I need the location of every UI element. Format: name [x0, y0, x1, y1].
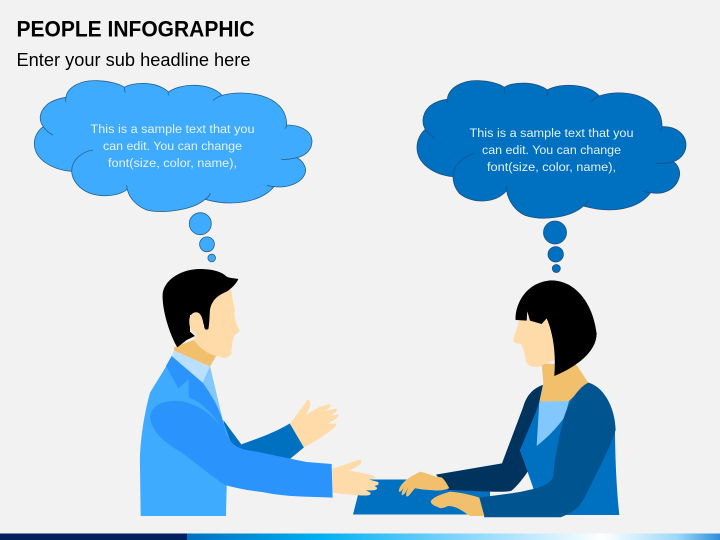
- bubble text: left: [90, 122, 254, 170]
- man ear: [189, 312, 205, 334]
- panel: right thought bubble: [417, 81, 686, 273]
- woman torso: [520, 383, 619, 515]
- man hair: [163, 269, 238, 347]
- woman near hand: [431, 492, 484, 516]
- panel: left thought bubble: [34, 81, 312, 262]
- woman far arm: [436, 385, 543, 492]
- bubble text: right: This is a sample text that you: [470, 126, 634, 140]
- bubble text: right: can edit. You can change: [482, 143, 621, 157]
- man face: [194, 289, 240, 358]
- woman far hand: [399, 472, 449, 497]
- bubble text: right: [470, 126, 634, 174]
- cloud shape: left: [34, 81, 312, 212]
- thought dots: left: [189, 213, 216, 262]
- man far hand: [291, 400, 338, 447]
- thought dots: right: [544, 221, 566, 272]
- man near hand: [333, 460, 378, 495]
- woman hair: [516, 280, 597, 376]
- man near arm: [150, 401, 333, 498]
- figure: woman: [399, 280, 619, 517]
- subtitle: Enter your sub headline here: [16, 50, 250, 70]
- woman near arm: [479, 383, 616, 517]
- man neck: [174, 340, 217, 367]
- bubble text: left: can edit. You can change: [103, 139, 242, 153]
- bubble text: left: This is a sample text that you: [90, 122, 254, 136]
- woman face: [513, 303, 557, 367]
- cloud shape: right: [417, 81, 686, 218]
- man inner shirt: [203, 367, 223, 420]
- figure: man: [140, 269, 378, 516]
- man torso: [140, 356, 230, 516]
- footer bar: [0, 534, 720, 540]
- woman inset: [537, 401, 569, 446]
- table: [353, 480, 490, 514]
- title: PEOPLE INFOGRAPHIC: [16, 16, 254, 42]
- bubble text: left: font(size, color, name),: [108, 156, 237, 170]
- man far arm: [223, 420, 304, 473]
- woman neck: [539, 363, 588, 402]
- man lapel: [166, 356, 227, 437]
- man collar: [172, 351, 210, 383]
- bubble text: right: font(size, color, name),: [487, 160, 616, 174]
